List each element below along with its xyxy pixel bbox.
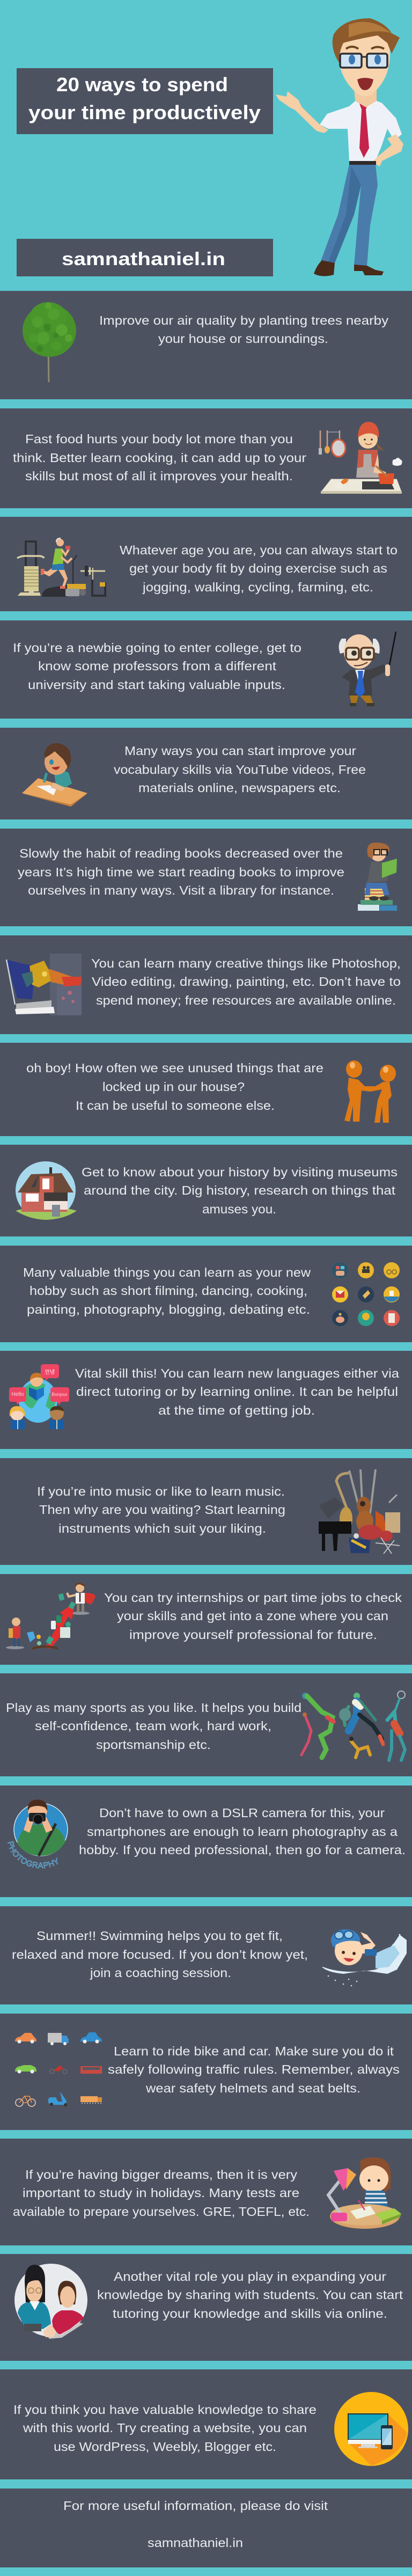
icon: digital art laptop (6, 954, 82, 1015)
icon: girl studying (328, 2157, 401, 2229)
text block (114, 744, 366, 795)
text block (82, 1165, 398, 1216)
text block: Play as many sports as you like. It helps you build (6, 1701, 301, 1715)
icon: hobby badges (332, 1262, 400, 1326)
title box (17, 68, 273, 134)
text block: self-confidence, team work, hard work, (35, 1719, 271, 1733)
text block: Learn to ride bike and car. Make sure you do it (114, 2044, 394, 2058)
panel: vocabulary (0, 728, 412, 819)
text block: oh boy! How often we see unused things that are (26, 1061, 323, 1075)
text block: materials online, newspapers etc. (138, 781, 341, 795)
text block: tutoring your knowledge and skills via online. (113, 2307, 387, 2321)
text block: You can try internships or part time jobs to check (104, 1591, 402, 1605)
panel: website (0, 2369, 412, 2479)
text block (91, 956, 401, 1007)
text block: with this world. Try creating a website, you can (23, 2421, 307, 2435)
text block (120, 543, 398, 594)
footer text: samnathaniel.in (148, 2536, 243, 2550)
panel: music (0, 1458, 412, 1565)
icon: computer and phone (334, 2392, 408, 2466)
text block: know some professors from a different (38, 659, 277, 673)
text block: painting, photography, blogging, debating etc. (27, 1302, 310, 1316)
icon: gym (17, 538, 105, 597)
text block: improve yourself professional for future. (129, 1628, 377, 1642)
text block (104, 1591, 402, 1642)
text block: university and start taking valuable inputs. (28, 678, 285, 692)
text block: skills but most of all it improves your health. (25, 469, 293, 483)
text block: think. Better learn cooking, it can add up to your (13, 451, 306, 465)
text block: Another vital role you play in expanding your (114, 2270, 386, 2284)
icon: photographer (8, 1799, 68, 1869)
text block: Slowly the habit of reading books decreased over the (19, 846, 343, 860)
text block: Fast food hurts your body lot more than you (25, 432, 293, 446)
icon: career growth arrow (6, 1584, 95, 1649)
icon: professor (339, 632, 396, 706)
header panel (17, 18, 403, 276)
icon: two orange figures (344, 1060, 396, 1123)
panel: driving (0, 2014, 412, 2130)
text block: available to prepare yourselves. GRE, TOEFL, etc. (13, 2205, 310, 2219)
footer text (63, 2499, 328, 2550)
text block (13, 2403, 317, 2454)
text block: Video editing, drawing, painting, etc. Don’t have to (92, 975, 401, 989)
panel: sports (0, 1673, 412, 1776)
text block: ourselves in many ways. Visit a library for instance. (28, 883, 334, 897)
panel: creative skills (0, 935, 412, 1034)
icon: language learners (9, 1364, 69, 1429)
text block (99, 313, 389, 346)
text block: If you’re into music or like to learn music. (37, 1484, 285, 1498)
text block: smartphones are enough to learn photography as a (87, 1825, 398, 1839)
title box: 20 ways to spend (56, 74, 228, 96)
text block: jogging, walking, cycling, farming, etc. (142, 580, 373, 594)
text block: vocabulary skills via YouTube videos, Free (114, 763, 366, 777)
text block: relaxed and more focused. If you don’t know yet, (12, 1948, 308, 1962)
panel: museums (0, 1145, 412, 1236)
text block: at the time of getting job. (158, 1403, 315, 1417)
text block: your house or surroundings. (158, 332, 328, 346)
text block (13, 432, 306, 483)
text block (13, 2168, 310, 2219)
text block: amuses you. (202, 1202, 276, 1216)
text block (23, 1265, 311, 1316)
panel: footer (0, 2489, 412, 2567)
panel: cooking (0, 408, 412, 508)
text block: safely following traffic rules. Remember, always (108, 2062, 400, 2076)
text block: Many valuable things you can learn as your new (23, 1265, 311, 1279)
text block: your skills and get into a zone where you can (117, 1609, 388, 1623)
text block: important to study in holidays. Many tests are (23, 2186, 299, 2200)
icon: boy writing (22, 743, 87, 807)
icon: tree (23, 302, 76, 382)
panel: hobbies (0, 1246, 412, 1342)
icon: house (16, 1161, 77, 1220)
website box (17, 239, 273, 276)
panel: reading books (0, 829, 412, 926)
text block: hobby such as short filming, dancing, cooking, (30, 1284, 307, 1298)
text block: If you’re having bigger dreams, then it is very (25, 2168, 298, 2182)
text block: hobby. If you need professional, then go for a camera. (79, 1843, 406, 1857)
text block: If you’re a newbie going to enter college, get to (13, 641, 301, 655)
text block: get your body fit by doing exercise such as (129, 561, 387, 575)
text block (18, 846, 344, 897)
icon: instruments (319, 1469, 400, 1554)
text block: Then why are you waiting? Start learning (39, 1503, 285, 1517)
icon: language learners: Bonjour (52, 1392, 68, 1397)
text block: Improve our air quality by planting trees nearby (99, 313, 389, 327)
text block (79, 1806, 406, 1857)
text block: Don’t have to own a DSLR camera for this, your (99, 1806, 385, 1820)
panel: languages (0, 1351, 412, 1449)
panel: tutoring (0, 2254, 412, 2361)
text block: sportsmanship etc. (96, 1738, 211, 1752)
panel: swimming (0, 1906, 412, 2004)
text block: spend money; free resources are available online. (96, 993, 396, 1007)
icon: reader on books (358, 843, 397, 911)
icon: cook (319, 422, 402, 494)
text block: Summer!! Swimming helps you to get fit, (36, 1929, 283, 1943)
icon: presenter character (276, 18, 403, 276)
text block: use WordPress, Weebly, Blogger etc. (54, 2440, 276, 2454)
panel: plant trees (0, 291, 412, 399)
panel: professors (0, 620, 412, 719)
text block: knowledge by sharing with students. You can start (97, 2288, 403, 2302)
text block: years It’s high time we start reading books to improve (18, 865, 344, 879)
text block (97, 2270, 403, 2321)
website box: samnathaniel.in (62, 249, 225, 269)
text block: wear safety helmets and seat belts. (145, 2081, 360, 2095)
icon: language learners: 안녕 (45, 1369, 55, 1375)
text block (75, 1366, 399, 1417)
title box: your time productively (28, 101, 261, 123)
text block: You can learn many creative things like Photoshop, (91, 956, 401, 970)
text block: locked up in our house? (102, 1080, 245, 1094)
text block: around the city. Dig history, research on things that (84, 1183, 396, 1197)
text block (26, 1061, 323, 1113)
text block (6, 1701, 301, 1752)
text block: If you think you have valuable knowledge to share (13, 2403, 317, 2417)
text block (13, 641, 301, 692)
text block (108, 2044, 400, 2095)
panel: internships (0, 1574, 412, 1665)
text block: instruments which suit your liking. (58, 1521, 266, 1535)
panel: donate unused things (0, 1043, 412, 1136)
text block: Get to know about your history by visiting museums (82, 1165, 398, 1179)
icon: photographer: PHOTOGRAPHY (8, 1841, 58, 1869)
panel: study in holidays (0, 2139, 412, 2245)
icon: language learners: Hello (12, 1392, 24, 1397)
text block: join a coaching session. (90, 1966, 231, 1980)
panel: exercise (0, 517, 412, 611)
icon: vehicles (15, 2032, 102, 2106)
text block: direct tutoring or by learning online. It can be helpful (76, 1385, 398, 1399)
icon: athletes (301, 1691, 405, 1760)
text block (37, 1484, 285, 1535)
text block: Whatever age you are, you can always start to (120, 543, 398, 557)
footer text: For more useful information, please do visit (63, 2499, 328, 2513)
panel: photography (0, 1785, 412, 1897)
icon: teacher and student (14, 2264, 87, 2339)
text block: It can be useful to someone else. (76, 1099, 275, 1113)
text block (12, 1929, 308, 1980)
icon: swimmer (322, 1929, 407, 1986)
text block: Vital skill this! You can learn new languages either via (75, 1366, 399, 1380)
text block: Many ways you can start improve your (124, 744, 356, 758)
